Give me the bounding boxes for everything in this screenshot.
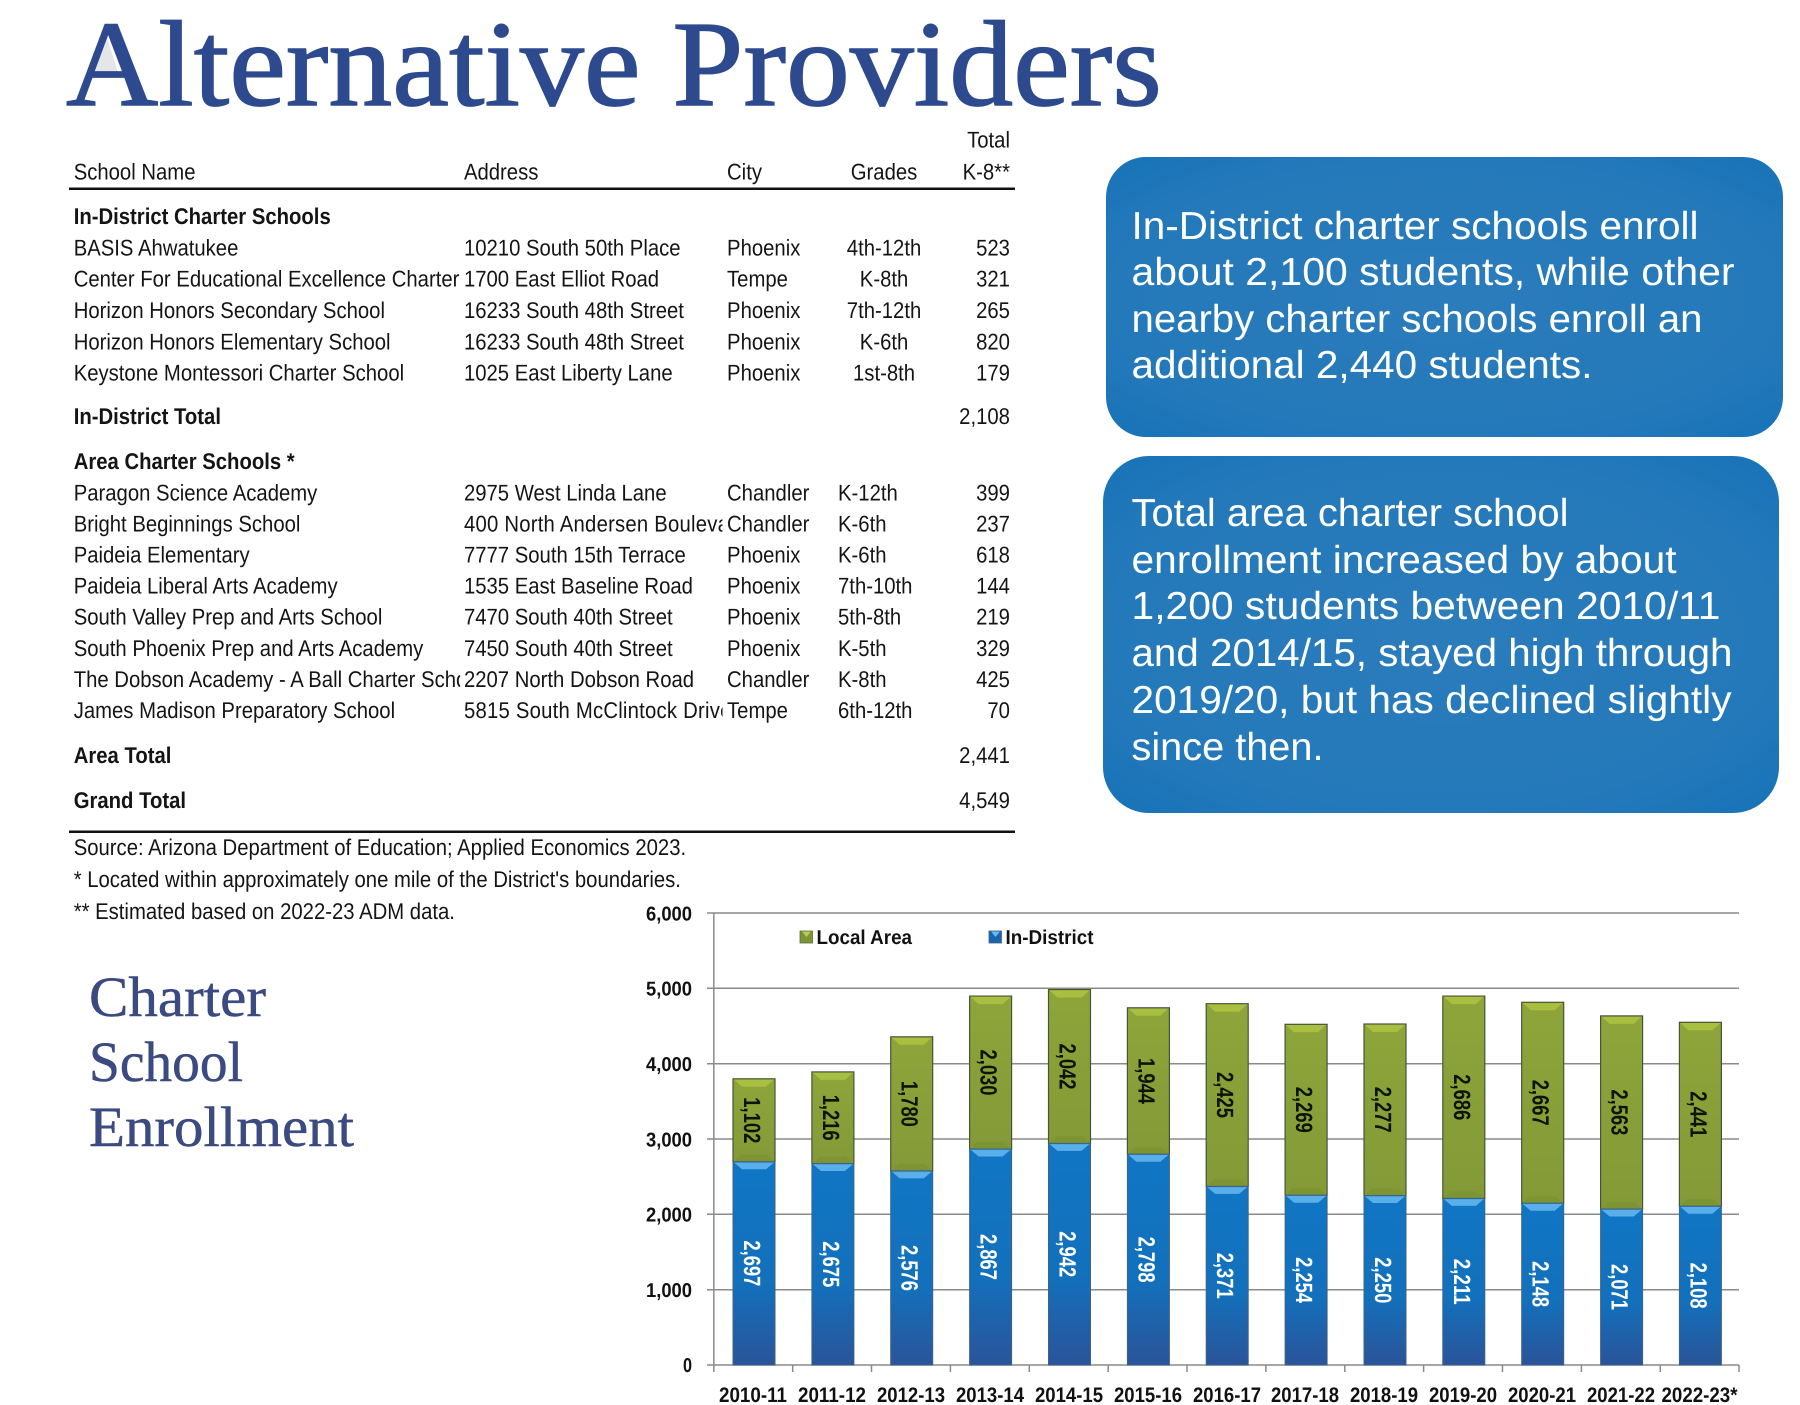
bar: 2019-20 [1443,996,1485,1365]
section: area charter schools: 7777 South 15th Terrace [464,542,686,568]
section: in-district charter schools: 1st-8th [853,360,915,386]
section: area charter schools: Area Total [74,742,171,768]
section: area charter schools: K-6th [838,510,887,536]
bar: 2013-14 [970,996,1012,1365]
section: area charter schools: Phoenix [727,635,801,661]
section: area charter schools: 237 [976,510,1010,536]
bar: 2010-11: 1,102 [739,1097,765,1143]
table footnotes: ** Estimated based on 2022-23 ADM data. [74,898,455,924]
section: area charter schools: Bright Beginnings School [74,510,300,536]
y-axis labels: 4,000 [646,1054,692,1076]
x-axis labels [719,1384,1738,1405]
section: in-district charter schools: K-6th [860,328,908,354]
section: in-district charter schools: 7th-12th [847,297,921,323]
section: area charter schools: 144 [976,572,1010,598]
callout: in-district enrollment: nearby charter schools enroll an [1132,298,1702,341]
table header: School Name [74,158,195,184]
y-axis labels: 2,000 [646,1204,692,1226]
table header: K-8** [963,158,1010,184]
section: area charter schools: The Dobson Academy - A Ball Charter School [74,666,483,692]
callout: area enrollment trend: 1,200 students between 2010/11 [1132,585,1720,628]
bar: 2014-15: 2,042 [1054,1044,1080,1090]
table header: Total [967,126,1010,152]
legend: Local Area [816,927,913,949]
bar: 2016-17 [1206,1004,1248,1365]
section: in-district charter schools: Center For Educational Excellence Charter [74,266,460,292]
section: in-district charter schools: K-8th [860,266,908,292]
section: area charter schools: 219 [976,604,1010,630]
grand total row: Grand Total [74,787,186,813]
table header: Address [464,158,538,184]
bar: 2011-12: 1,216 [818,1095,844,1141]
bar: 2014-15 [1048,990,1090,1365]
section: in-district charter schools: 16233 South 48th Street [464,328,685,354]
section: area charter schools: Phoenix [727,572,801,598]
grand total row [74,787,1010,813]
section: area charter schools: Tempe [727,697,788,723]
section: in-district charter schools: In-District Charter Schools [74,203,331,229]
section: in-district charter schools: Phoenix [727,297,801,323]
table footnotes [74,834,686,924]
table header [74,126,1010,184]
bar: 2018-19: 2,277 [1370,1087,1396,1133]
callout: area enrollment trend [1103,456,1779,813]
section: area charter schools: K-12th [838,480,898,506]
bar: 2010-11: 2,697 [739,1240,765,1286]
section: in-district charter schools: In-District Total [74,403,221,429]
bar: 2011-12 [812,1072,854,1365]
bar: 2013-14: 2,030 [976,1050,1002,1096]
section: in-district charter schools: 265 [976,297,1010,323]
bar: 2022-23: 2,441 [1685,1091,1711,1137]
section: area charter schools: Paragon Science Academy [74,480,318,506]
bar: 2012-13: 2,576 [897,1245,923,1291]
table footnotes: * Located within approximately one mile of the District's boundaries. [74,866,681,892]
section: in-district charter schools: 4th-12th [847,234,921,260]
callout: in-district enrollment: In-District charter schools enroll [1132,205,1698,248]
section: area charter schools: 7450 South 40th Street [464,635,673,661]
callout: area enrollment trend: Total area charter school [1132,492,1568,535]
bar: 2021-22 [1601,1016,1643,1365]
section: area charter schools: 6th-12th [838,697,912,723]
bar: 2020-21: 2,667 [1528,1080,1554,1126]
bar: 2014-15: 2,942 [1054,1231,1080,1277]
section: area charter schools: 399 [976,480,1010,506]
title: Alternative Providers [66,0,1162,132]
section: in-district charter schools: 1025 East Liberty Lane [464,360,673,386]
section: area charter schools: South Phoenix Prep and Arts Academy [74,635,424,661]
bar: 2021-22: 2,071 [1607,1264,1633,1310]
callout: in-district enrollment: about 2,100 students, while other [1132,251,1734,294]
section: area charter schools: James Madison Preparatory School [74,697,395,723]
y-axis labels: 0 [683,1355,692,1377]
bar: 2021-22: 2,563 [1607,1089,1633,1135]
bar: 2018-19: 2,250 [1370,1257,1396,1303]
grand total row: 4,549 [959,787,1010,813]
section: area charter schools: 329 [976,635,1010,661]
heading: charter school enrollment: Enrollment [89,1096,354,1159]
section: area charter schools: 7470 South 40th Street [464,604,673,630]
section: area charter schools: Paideia Elementary [74,542,250,568]
bar: 2013-14: 2,867 [976,1234,1002,1280]
section: in-district charter schools: 179 [976,360,1010,386]
section: in-district charter schools [74,203,1010,429]
section: area charter schools: 618 [976,542,1010,568]
bar: 2015-16: 1,944 [1133,1058,1159,1104]
section: area charter schools: Area Charter Schools * [74,448,295,474]
bar: 2016-17: 2,425 [1212,1072,1238,1118]
section: area charter schools: K-5th [838,635,887,661]
section: in-district charter schools: Horizon Honors Secondary School [74,297,385,323]
section: in-district charter schools: Phoenix [727,360,801,386]
section: area charter schools: 2,441 [959,742,1010,768]
legend [800,927,1094,949]
section: area charter schools: K-6th [838,542,887,568]
section: area charter schools: 5815 South McClintock Drive [464,697,732,723]
section: area charter schools: 425 [976,666,1010,692]
section: area charter schools: 5th-8th [838,604,901,630]
y-axis labels [646,904,692,1377]
section: in-district charter schools: 10210 South 50th Place [464,234,681,260]
section: area charter schools: Chandler [727,480,810,506]
section: area charter schools: Phoenix [727,542,801,568]
section: area charter schools: Chandler [727,510,810,536]
callout: in-district enrollment [1106,157,1783,437]
section: in-district charter schools: 321 [976,266,1010,292]
heading: charter school enrollment: Charter [89,966,266,1029]
callout: area enrollment trend: enrollment increased by about [1132,539,1677,582]
section: in-district charter schools: Horizon Honors Elementary School [74,328,391,354]
bar: 2017-18: 2,269 [1291,1087,1317,1133]
bar: 2010-11 [733,1079,775,1365]
section: area charter schools: 400 North Andersen Boulevard [464,510,748,536]
callout: area enrollment trend: 2019/20, but has declined slightly [1132,679,1732,722]
bar: 2022-23: 2,108 [1685,1263,1711,1309]
section: area charter schools: K-8th [838,666,887,692]
bar: 2019-20: 2,686 [1449,1074,1475,1120]
bar: 2020-21 [1522,1002,1564,1365]
heading: charter school enrollment: School [89,1031,243,1094]
bar: 2015-16: 2,798 [1133,1237,1159,1283]
section: in-district charter schools: 1700 East Elliot Road [464,266,659,292]
y-axis labels: 3,000 [646,1130,692,1152]
section: area charter schools: 2975 West Linda Lane [464,480,667,506]
legend: In-District [1006,927,1094,949]
section: area charter schools: 1535 East Baseline Road [464,572,693,598]
table footnotes: Source: Arizona Department of Education; Applied Economics 2023. [74,834,686,860]
bar: 2020-21: 2,148 [1528,1261,1554,1307]
bar: 2016-17: 2,371 [1212,1253,1238,1299]
section: area charter schools: Paideia Liberal Arts Academy [74,572,338,598]
section: in-district charter schools: Tempe [727,266,788,292]
section: area charter schools: Chandler [727,666,810,692]
bar: 2012-13: 1,780 [897,1081,923,1127]
callout: area enrollment trend: and 2014/15, stayed high through [1132,632,1732,675]
bar: 2015-16 [1127,1008,1169,1365]
y-axis labels: 1,000 [646,1280,692,1302]
bar: 2022-23 [1679,1022,1721,1365]
section: in-district charter schools: Keystone Montessori Charter School [74,360,404,386]
bar: 2017-18 [1285,1024,1327,1365]
section: in-district charter schools: Phoenix [727,328,801,354]
callout: in-district enrollment: additional 2,440 students. [1132,344,1592,387]
bar: 2012-13 [891,1037,933,1365]
section: area charter schools: Phoenix [727,604,801,630]
bar: 2019-20: 2,211 [1449,1259,1475,1305]
section: area charter schools: 2207 North Dobson Road [464,666,694,692]
section: in-district charter schools: Phoenix [727,234,801,260]
section: in-district charter schools: 523 [976,234,1010,260]
enrollment table [69,126,1015,924]
section: in-district charter schools: BASIS Ahwatukee [74,234,238,260]
table header: Grades [851,158,917,184]
table header: City [727,158,763,184]
bar: 2018-19 [1364,1024,1406,1365]
y-axis labels: 6,000 [646,904,692,926]
bar: 2017-18: 2,254 [1291,1257,1317,1303]
stacked bar chart [646,904,1739,1405]
callout: area enrollment trend: since then. [1132,726,1324,769]
section: area charter schools: 70 [987,697,1010,723]
section: in-district charter schools: 16233 South 48th Street [464,297,685,323]
section: in-district charter schools: 2,108 [959,403,1010,429]
section: in-district charter schools: 820 [976,328,1010,354]
bar: 2011-12: 2,675 [818,1241,844,1287]
y-axis labels: 5,000 [646,978,692,1000]
section: area charter schools: South Valley Prep and Arts School [74,604,382,630]
section: area charter schools: 7th-10th [838,572,912,598]
heading: charter school enrollment [89,966,354,1159]
section: area charter schools [74,448,1010,768]
